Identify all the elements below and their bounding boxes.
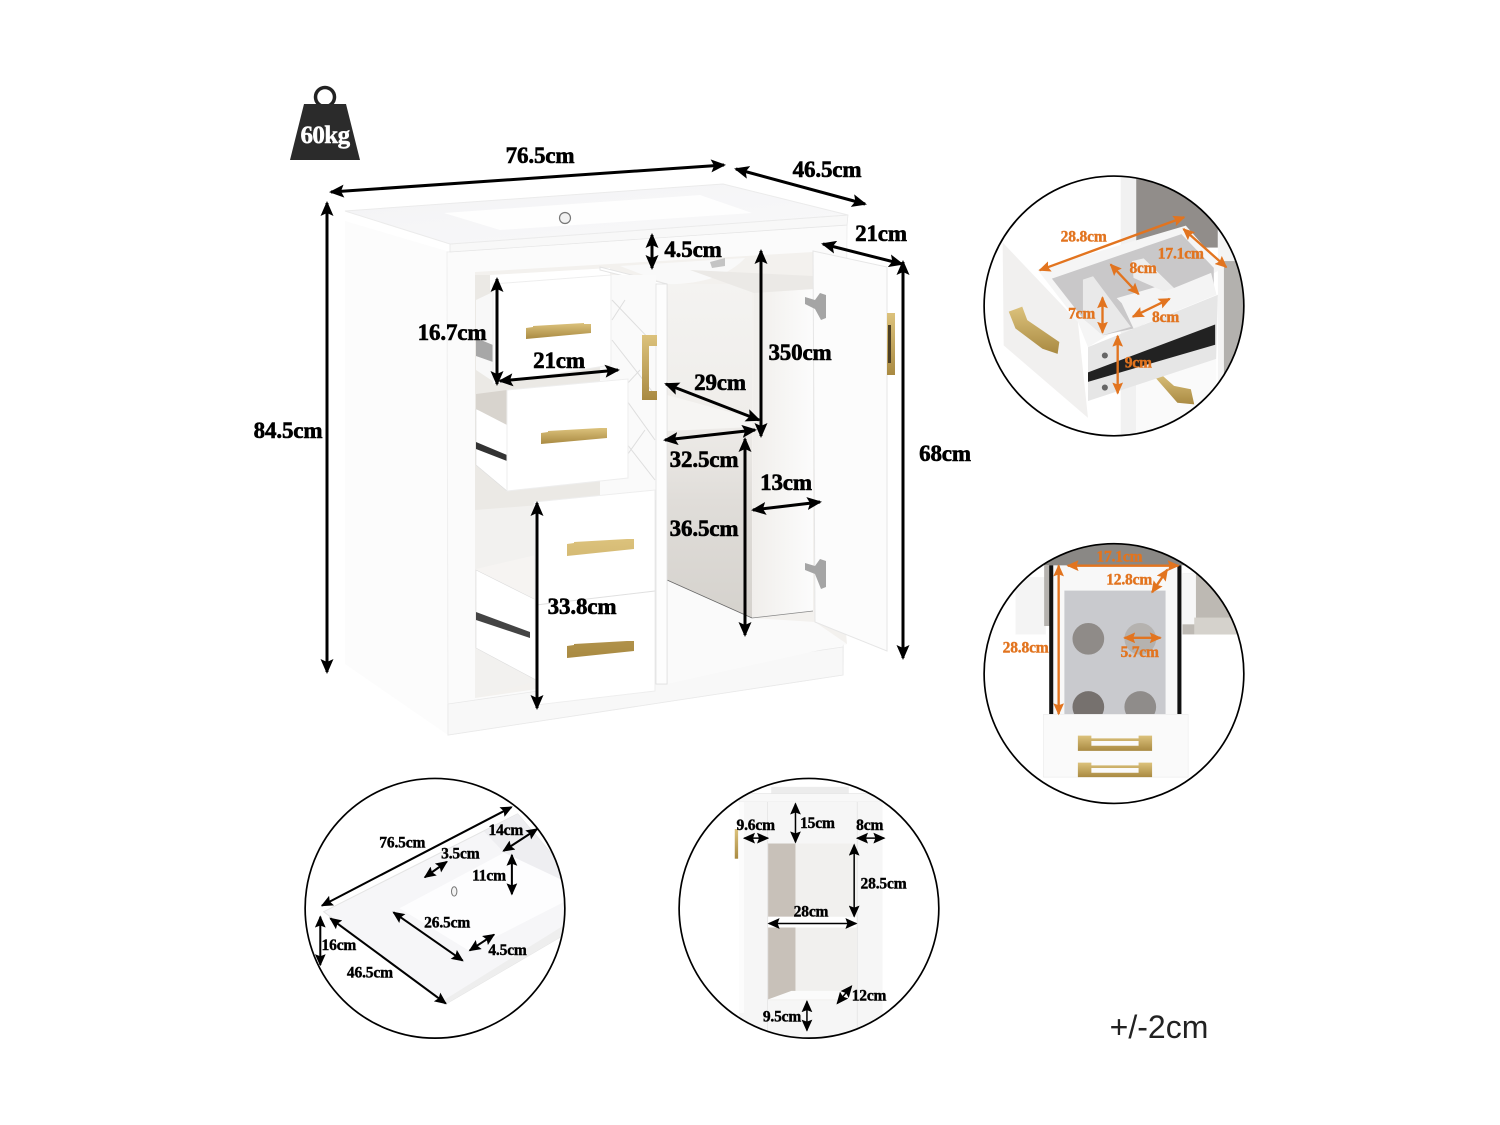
panel: sink top detail: 11cm [472, 867, 506, 884]
drawer 3 handles [567, 539, 634, 658]
dimension: drawer 21cm: 21cm [533, 348, 585, 373]
drawer 3 front [534, 490, 655, 705]
dimension: 29cm: 29cm [694, 370, 746, 395]
left compartment back [475, 275, 610, 510]
dimension: overall width 76.5cm: 76.5cm [506, 143, 574, 168]
drawer 2 body [476, 409, 507, 491]
panel: drawer organizer detail: 28.8cm [1061, 229, 1107, 246]
dimension: 13cm: 13cm [760, 470, 812, 495]
panel: cabinet rear cutout detail [678, 778, 940, 1039]
dimension: door width 21cm: 21cm [855, 221, 907, 246]
panel: drawer organizer detail: 17.1cm [1158, 246, 1204, 263]
panel: drawer organizer detail: 8cm [1129, 260, 1157, 277]
interior opening [475, 252, 847, 698]
dimension: overall width 76.5cm [331, 143, 724, 192]
panel: cabinet rear cutout detail: 12cm [852, 988, 887, 1005]
kick plate [448, 647, 843, 735]
panel: cabinet rear cutout detail: 15cm [800, 815, 835, 832]
panel: cabinet rear cutout detail: 9.6cm [737, 817, 775, 834]
panel: sink top detail: 14cm [488, 822, 523, 839]
center door panel [600, 267, 667, 684]
faucet hole [560, 212, 570, 224]
panel: sink top detail: 3.5cm [441, 846, 480, 863]
panel: sink top detail [304, 778, 566, 1039]
panel: drawer organizer detail: 9cm [1125, 355, 1152, 372]
dimension: drawer 33.8cm: 33.8cm [548, 594, 616, 619]
icon: weight 60kg: 60kg [300, 122, 351, 149]
icon: weight 60kg [290, 88, 360, 160]
panel: cabinet rear cutout detail: 8cm [856, 817, 883, 834]
panel: cabinet rear cutout detail: 28.5cm [861, 876, 907, 893]
dimension: 13cm [753, 470, 820, 510]
panel: sink top detail: 76.5cm [379, 835, 425, 852]
countertop front edge [450, 215, 848, 252]
hinge top [805, 293, 826, 320]
panel: drawer organizer detail: 7cm [1068, 305, 1095, 322]
countertop [345, 184, 848, 244]
panel: bottle drawer detail [975, 540, 1255, 810]
dimension: drawer 16.7cm: 16.7cm [418, 320, 486, 345]
panel: cabinet rear cutout detail: 28cm [794, 903, 829, 920]
side panel [345, 221, 450, 735]
front frame [447, 225, 847, 735]
panel: sink top detail: 26.5cm [424, 915, 470, 932]
panel: bottle drawer detail: 28.8cm [1003, 639, 1049, 656]
drawer 1 body [476, 290, 497, 384]
open right door [813, 251, 887, 651]
dimension: rail 4.5cm: 4.5cm [664, 237, 722, 262]
sink bowl underside [620, 258, 745, 284]
dimension: 32.5cm: 32.5cm [670, 447, 738, 472]
dimension: 350cm: 350cm [768, 340, 832, 365]
dimension: door width 21cm [823, 221, 907, 264]
panel: drawer organizer detail: 8cm [1152, 309, 1179, 326]
panel: bottle drawer detail: 12.8cm [1106, 572, 1152, 589]
basin [444, 195, 752, 230]
dimension: 36.5cm: 36.5cm [670, 516, 738, 541]
panel: drawer organizer detail [975, 170, 1255, 440]
panel: bottle drawer detail: 17.1cm [1096, 549, 1143, 566]
vanity cabinet illustration [345, 184, 895, 735]
dimension: drawer 16.7cm [418, 279, 497, 384]
dimension: 29cm [666, 370, 759, 420]
door handle [887, 313, 895, 375]
drawer 2 handle [541, 428, 607, 444]
panel: sink top detail: 16cm [322, 937, 356, 954]
shelf [667, 395, 752, 431]
drawer 2 front [507, 379, 628, 491]
panel: bottle drawer detail: 5.7cm [1120, 644, 1159, 661]
dimension: depth 46.5cm: 46.5cm [793, 157, 861, 182]
note: tolerance: +/-2cm [1110, 1009, 1208, 1045]
dimension: height 84.5cm: 84.5cm [254, 418, 322, 443]
dimension: door height 68cm: 68cm [919, 441, 971, 466]
drawer 3 body [476, 555, 536, 613]
drawer 1 handle [526, 323, 591, 339]
panel: sink top detail: 4.5cm [488, 942, 527, 959]
dimension: 32.5cm [665, 430, 755, 472]
panel: cabinet rear cutout detail: 9.5cm [763, 1009, 801, 1026]
dimension: depth 46.5cm [736, 157, 865, 204]
dimension: rail 4.5cm [652, 235, 722, 268]
inner box [752, 289, 813, 618]
drawer 1 front [493, 275, 611, 384]
panel: sink top detail: 46.5cm [347, 964, 393, 981]
right compartment back wall [667, 284, 752, 618]
center door handle [642, 335, 657, 400]
dimension: drawer 21cm [500, 348, 618, 381]
hinge bottom [805, 559, 826, 589]
